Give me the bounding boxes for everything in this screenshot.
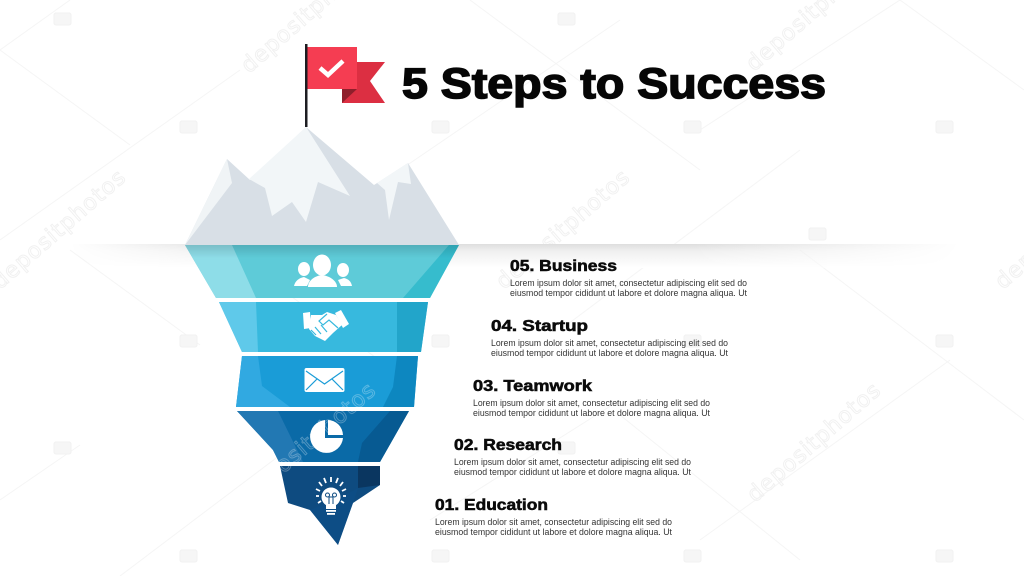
text block: 05 Business: eiusmod tempor cididunt ut labore et dolore magna aliqua. Ut: [510, 288, 747, 299]
icon: handshake: [303, 310, 349, 341]
layer 02: research: [237, 411, 409, 462]
icon: flag: [305, 44, 385, 127]
text block: 02 Research: [454, 437, 691, 478]
text block: 04 Startup: Lorem ipsum dolor sit amet, consectetur adipiscing elit sed do: [491, 338, 728, 349]
water line shadow: [116, 244, 890, 268]
layer 01: education: [280, 466, 380, 545]
text block: 04 Startup: [491, 318, 728, 359]
text block: 05 Business: 05. Business: [510, 258, 617, 275]
text block: 01 Education: Lorem ipsum dolor sit amet, consectetur adipiscing elit sed do: [435, 517, 672, 528]
watermark background: depositphotos: [492, 165, 635, 295]
iceberg above water: [185, 127, 459, 245]
text block: 01 Education: 01. Education: [435, 497, 548, 514]
layer 05: business: [185, 245, 459, 298]
text block: 04 Startup: 04. Startup: [491, 318, 588, 335]
text block: 03 Teamwork: eiusmod tempor cididunt ut labore et dolore magna aliqua. Ut: [473, 408, 710, 419]
title: 5 Steps to Success: [402, 60, 826, 108]
layer 04: startup: [219, 302, 428, 352]
icon: people: [294, 254, 352, 287]
text block: 03 Teamwork: [473, 378, 710, 419]
text block: 03 Teamwork: Lorem ipsum dolor sit amet, consectetur adipiscing elit sed do: [473, 398, 710, 409]
layer 03: teamwork: [236, 356, 418, 407]
icon: envelope: [304, 368, 344, 392]
text block: 01 Education: [435, 497, 672, 538]
text block: 02 Research: 02. Research: [454, 437, 562, 454]
text block: 03 Teamwork: 03. Teamwork: [473, 378, 592, 395]
icon: pie chart: [310, 420, 343, 453]
icon: light bulb: [316, 477, 346, 515]
text block: 02 Research: eiusmod tempor cididunt ut labore et dolore magna aliqua. Ut: [454, 467, 691, 478]
watermark background: depositphotos: [743, 378, 886, 508]
text block: 01 Education: eiusmod tempor cididunt ut labore et dolore magna aliqua. Ut: [435, 527, 672, 538]
text block: 05 Business: Lorem ipsum dolor sit amet, consectetur adipiscing elit sed do: [510, 278, 747, 289]
text block: 05 Business: [510, 258, 747, 299]
text block: 02 Research: Lorem ipsum dolor sit amet, consectetur adipiscing elit sed do: [454, 457, 691, 468]
watermark over iceberg: depositphotos: [238, 378, 381, 508]
text block: 04 Startup: eiusmod tempor cididunt ut labore et dolore magna aliqua. Ut: [491, 348, 728, 359]
